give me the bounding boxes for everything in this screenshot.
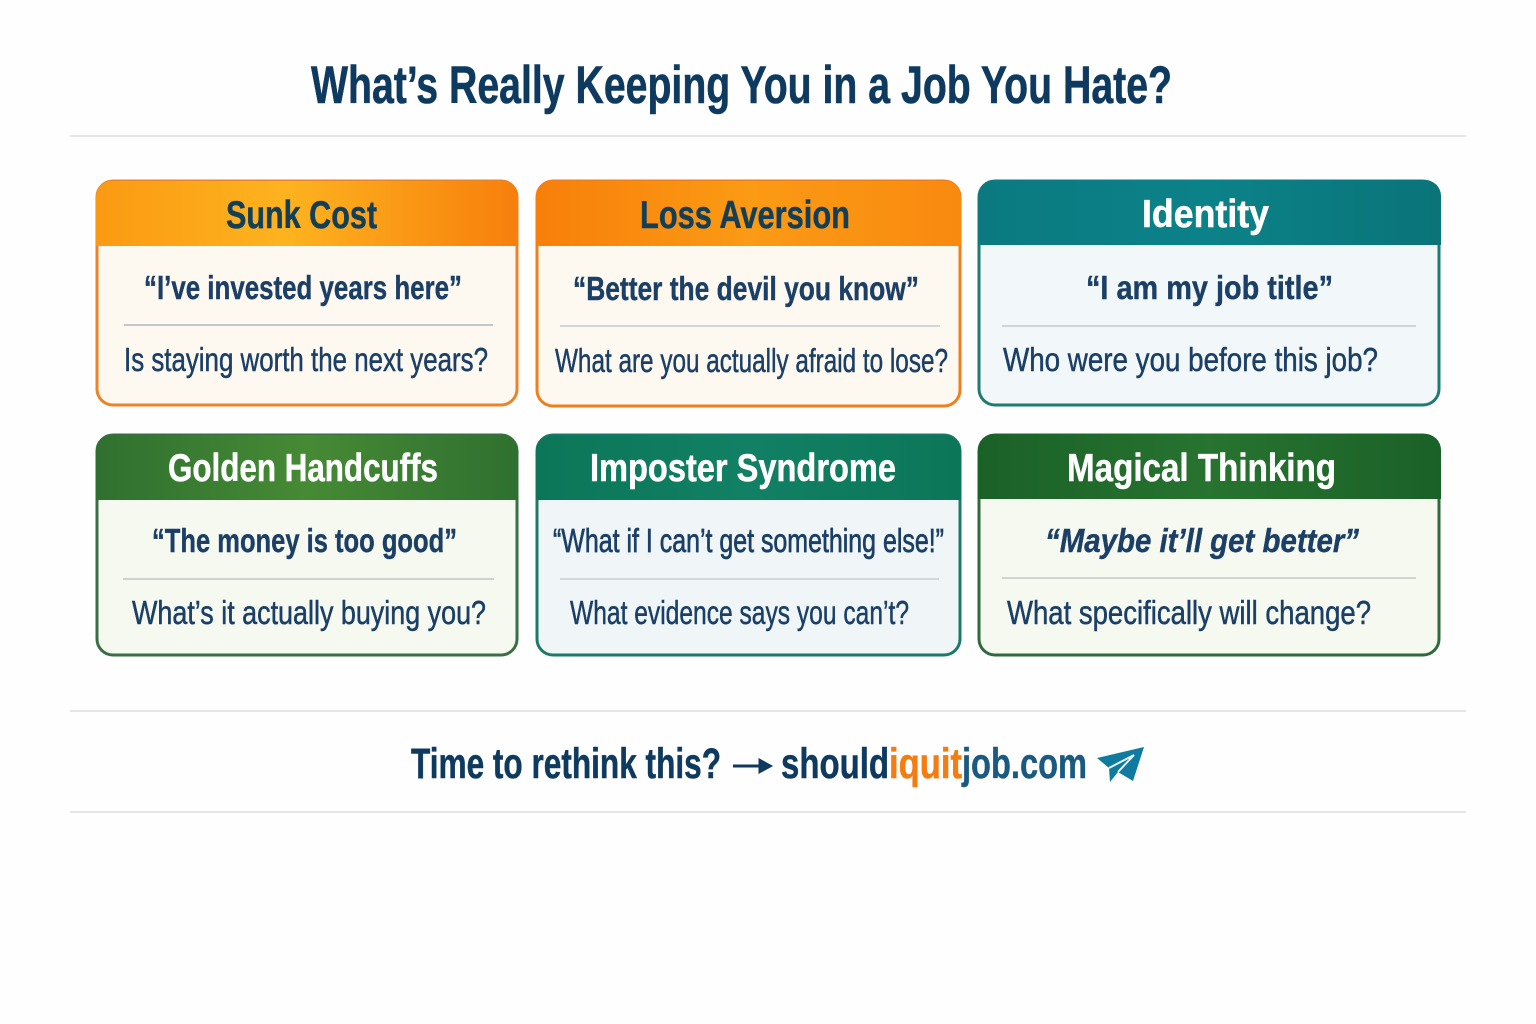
panel: Imposter Syndrome (536, 435, 961, 655)
heading: Sunk Cost (226, 194, 377, 237)
call to action: iquit (889, 740, 962, 788)
panel: Loss Aversion (536, 181, 961, 406)
panel: Identity (978, 180, 1441, 405)
heading: Magical Thinking (1067, 447, 1336, 490)
question: Who were you before this job? (1003, 341, 1378, 378)
call to action: Time to rethink this? (411, 740, 721, 788)
heading: Imposter Syndrome (590, 447, 896, 490)
question: What’s it actually buying you? (132, 594, 486, 631)
quote: “I’ve invested years here” (144, 269, 462, 306)
call to action (411, 740, 1144, 788)
question: What evidence says you can’t? (570, 594, 909, 631)
question: What specifically will change? (1007, 594, 1371, 631)
quote: “I am my job title” (1086, 269, 1333, 306)
quote: “Better the devil you know” (573, 270, 919, 307)
quote: “What if I can’t get something else!” (553, 522, 944, 559)
panel: Magical Thinking (978, 434, 1441, 655)
heading: Golden Handcuffs (168, 447, 438, 490)
arrow (733, 760, 770, 772)
heading: Loss Aversion (640, 194, 850, 237)
icon: paper plane (1097, 747, 1144, 782)
heading: Identity (1142, 193, 1269, 236)
question: What are you actually afraid to lose? (555, 342, 948, 379)
title: What’s Really Keeping You in a Job You Hate? (311, 56, 1172, 115)
panel: Sunk Cost (96, 181, 518, 405)
call to action: should (781, 740, 889, 788)
question: Is staying worth the next years? (124, 341, 488, 378)
call to action: job.com (961, 740, 1087, 788)
quote: “The money is too good” (152, 522, 457, 559)
panel: Golden Handcuffs (96, 435, 518, 655)
quote: “Maybe it’ll get better” (1045, 522, 1359, 559)
